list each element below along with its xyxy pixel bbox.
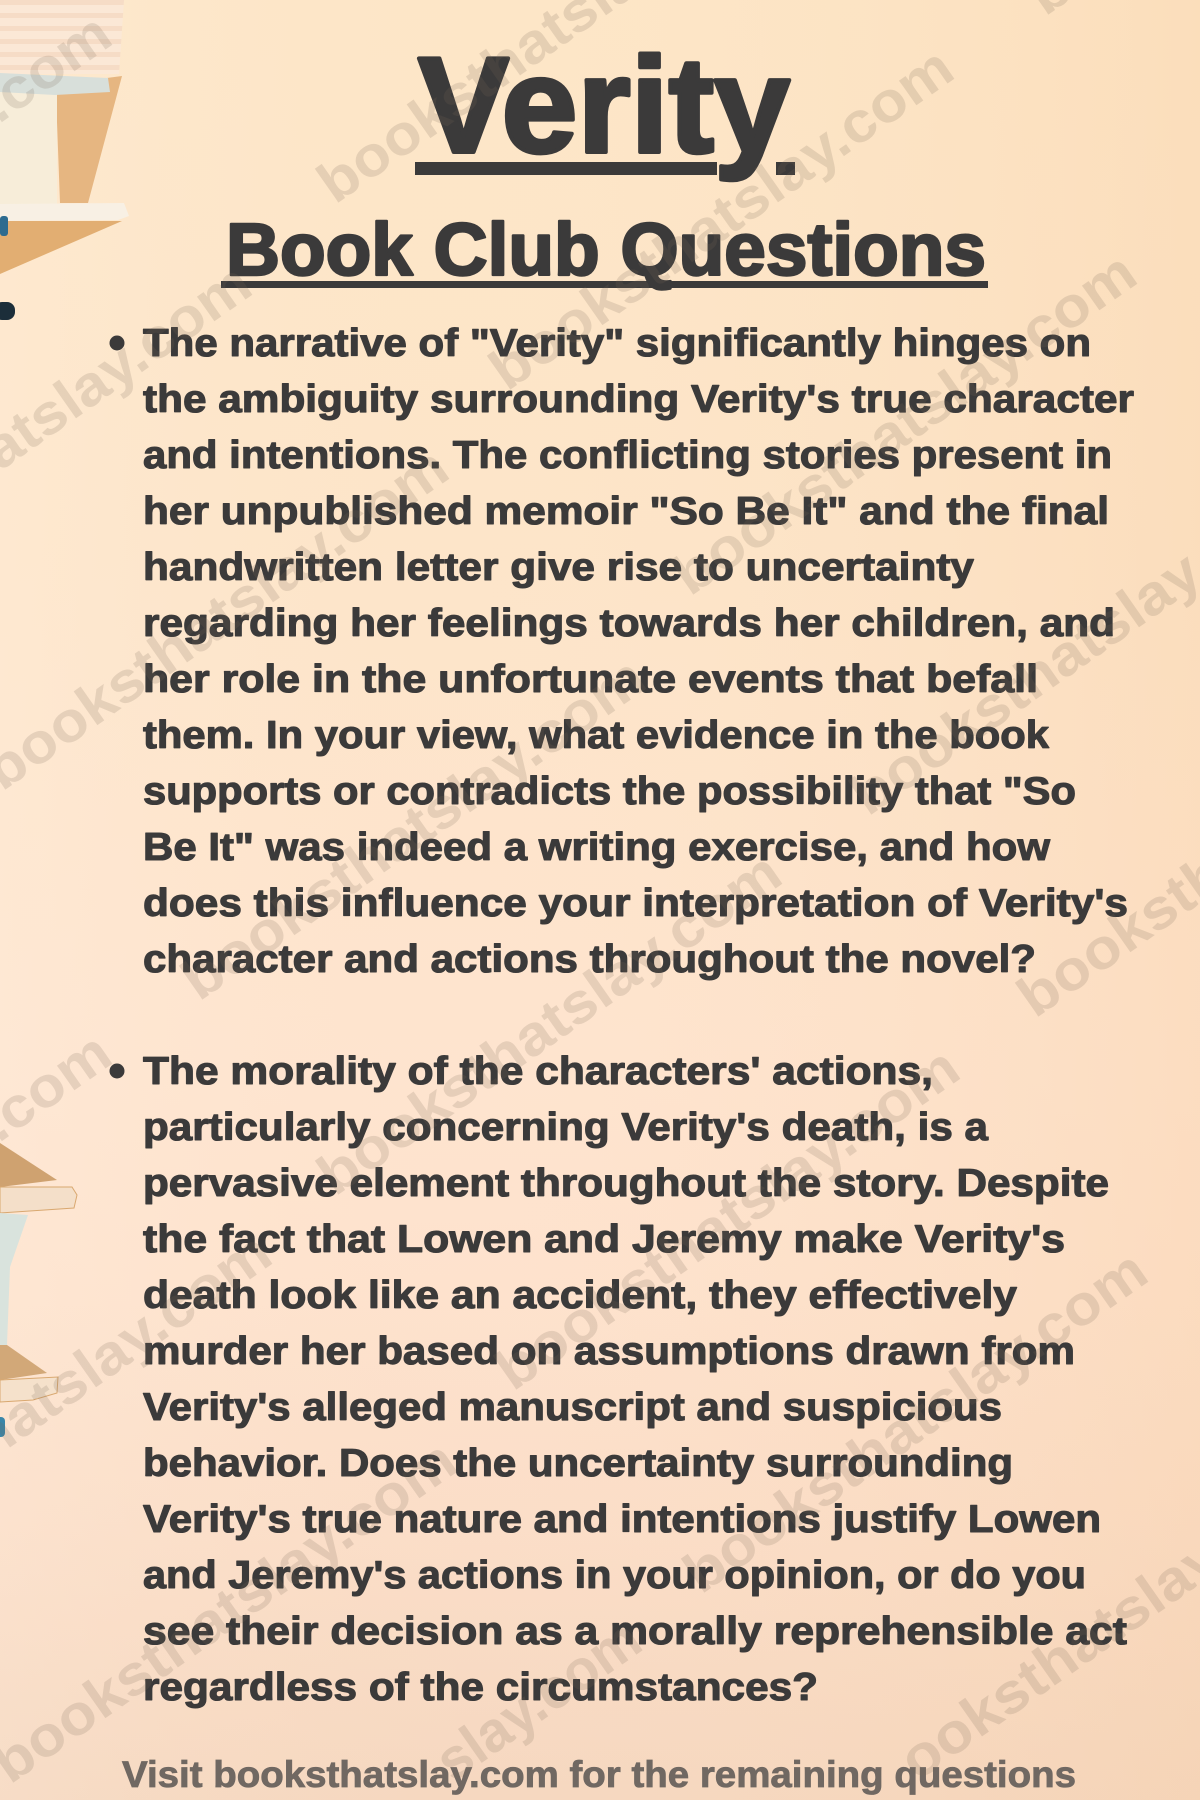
question 2 bullet text: Verity's alleged manuscript and suspicious (143, 1386, 1002, 1429)
question 1 bullet text: regarding her feelings towards her children, and (143, 602, 1115, 645)
question 1 bullet text: Be It" was indeed a writing exercise, and how (143, 826, 1051, 869)
watermarks: booksthatslay.com: slay.com (424, 1606, 653, 1794)
subtitle: Book Club Questions: Book Club Questions (226, 208, 986, 291)
watermarks: booksthatslay.com: booksthatslay.com (478, 35, 965, 403)
question 2 bullet text (110, 1050, 1127, 1709)
illustration: mid-left book stack (0, 1143, 77, 1437)
watermarks: booksthatslay.com: booksthatslay.com (661, 240, 1148, 608)
question 1 bullet text: the ambiguity surrounding Verity's true character (143, 378, 1134, 421)
question 2 bullet text: pervasive element throughout the story. Despite (143, 1162, 1109, 1205)
question 2 bullet text: Verity's true nature and intentions justify Lowen (143, 1498, 1101, 1541)
title: Verity: Verity (418, 29, 790, 181)
question 1 bullet text: character and actions throughout the novel? (143, 938, 1036, 981)
question 2 bullet text: behavior. Does the uncertainty surrounding (143, 1442, 1013, 1485)
watermarks: booksthatslay.com: booksthatslay.com (484, 1035, 971, 1403)
question 2 bullet text: death look like an accident, they effectively (143, 1274, 1017, 1317)
question 2 bullet text: particularly concerning Verity's death, is a (143, 1106, 988, 1149)
question 2 bullet text: murder her based on assumptions drawn from (143, 1330, 1075, 1373)
question 1 bullet text (110, 322, 1134, 981)
question 2 bullet text: and Jeremy's actions in your opinion, or do you (143, 1554, 1086, 1597)
question 1 bullet text: handwritten letter give rise to uncertainty (143, 546, 974, 589)
illustration: top-left book stack (0, 0, 129, 320)
question 2 bullet text: see their decision as a morally reprehensible act (143, 1610, 1127, 1653)
question 1 bullet text: them. In your view, what evidence in the book (143, 714, 1049, 757)
question 1 bullet text: her unpublished memoir "So Be It" and the final (143, 490, 1109, 533)
question 1 bullet text: her role in the unfortunate events that befall (143, 658, 1038, 701)
question 2 bullet text: the fact that Lowen and Jeremy make Verity's (143, 1218, 1065, 1261)
watermarks: booksthatslay.com: booksthatslay.com (306, 840, 793, 1208)
question 2 bullet text: The morality of the characters' actions, (143, 1050, 933, 1093)
watermarks: booksthatslay.com: booksthatslay.com (170, 645, 657, 1013)
question 1 bullet text: The narrative of "Verity" significantly hinges on (143, 322, 1091, 365)
question 1 bullet text: and intentions. The conflicting stories present in (143, 434, 1112, 477)
watermarks: booksthatslay.com: booksthatslay.com (672, 1238, 1159, 1606)
question 1 bullet text: does this influence your interpretation of Verity's (143, 882, 1128, 925)
question 2 bullet text: regardless of the circumstances? (143, 1666, 818, 1709)
question 1 bullet text: supports or contradicts the possibility that "So (143, 770, 1076, 813)
footer call to action: Visit booksthatslay.com for the remaining questions (122, 1754, 1076, 1795)
